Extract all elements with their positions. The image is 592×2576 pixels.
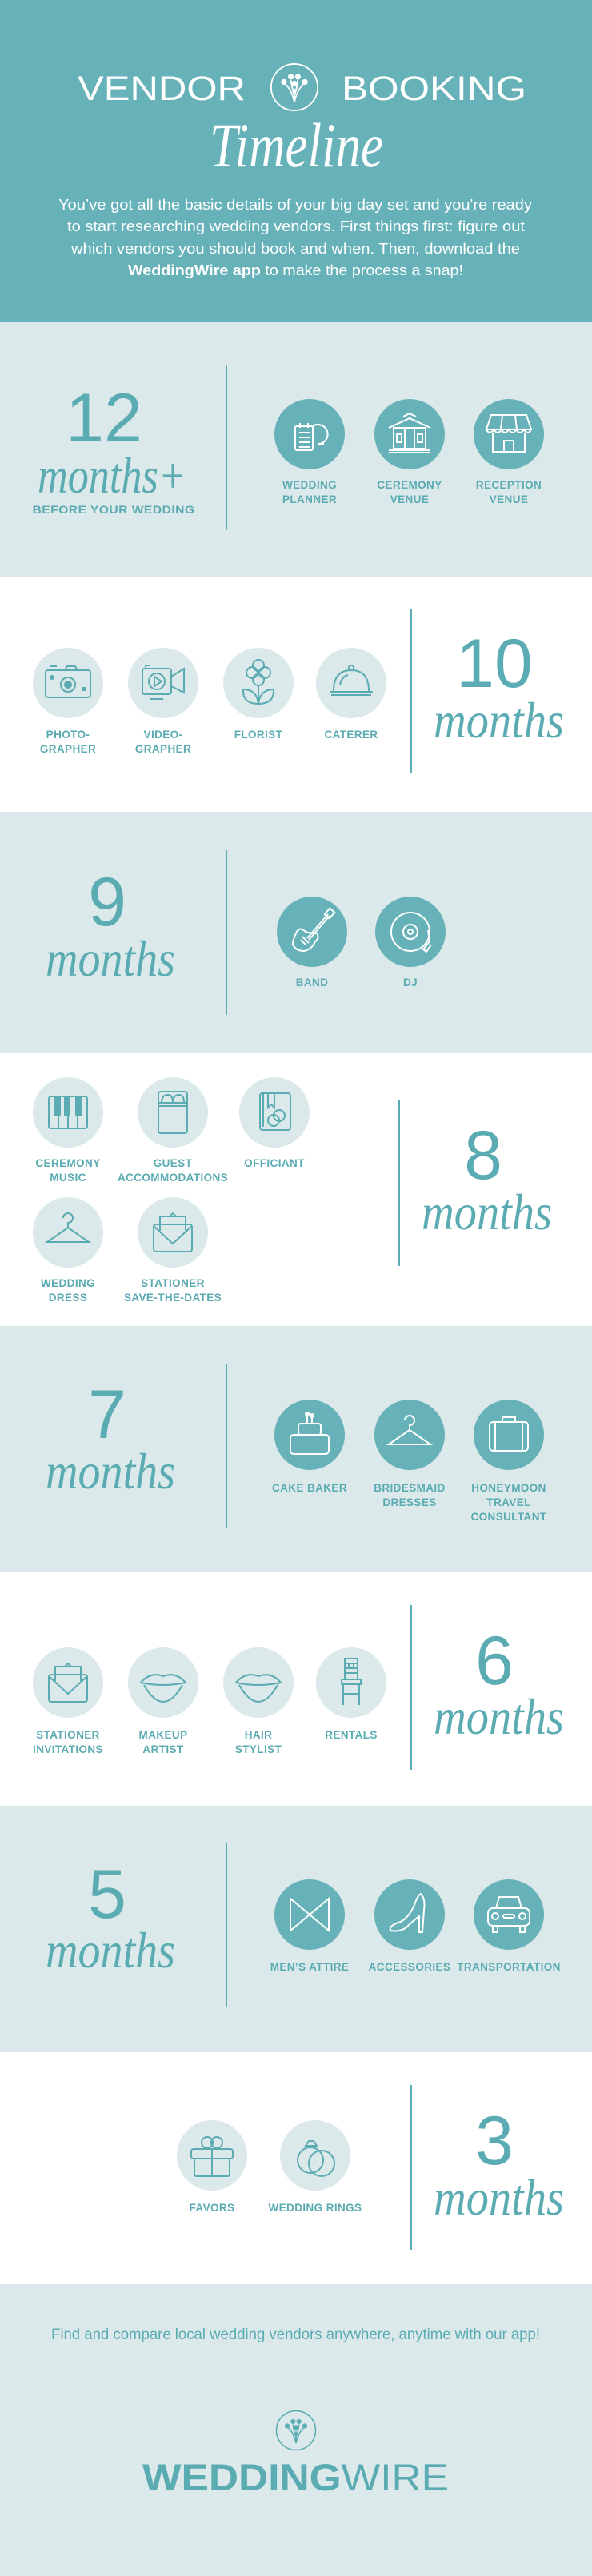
vendor: honeymoon travel consultant: TRAVEL: [486, 1496, 531, 1508]
vendor: ceremony venue: VENUE: [390, 493, 429, 505]
vendor: honeymoon travel consultant: CONSULTANT: [470, 1511, 547, 1523]
vendor: videographer: GRAPHER: [135, 743, 191, 755]
months: months: [46, 930, 175, 987]
vendor: stationer save-the-dates: [124, 1197, 222, 1304]
panel: 9 months: [0, 812, 592, 1053]
title: timeline script: Timeline: [210, 110, 383, 180]
vendor: makeup artist: ARTIST: [142, 1743, 184, 1755]
vendor: rentals: [316, 1647, 386, 1741]
vendor: wedding planner: WEDDING: [282, 479, 337, 491]
vendor: stationer invitations: [33, 1647, 103, 1755]
vendor: cake baker: [272, 1400, 347, 1494]
vendor: transportation: TRANSPORTATION: [457, 1961, 561, 1973]
vendor: stationer save-the-dates: STATIONER: [141, 1277, 205, 1289]
vendor: bridesmaid dresses: DRESSES: [382, 1496, 437, 1508]
vendor: caterer: CATERER: [324, 729, 378, 741]
vendor: accessories: [369, 1879, 450, 1973]
vendor: mens attire: MEN’S ATTIRE: [270, 1961, 349, 1973]
vendor: guest accommodations: ACCOMMODATIONS: [118, 1172, 228, 1184]
vendor: reception venue: VENUE: [490, 493, 528, 505]
vendor: photographer: GRAPHER: [40, 743, 96, 755]
vendor: hair stylist: HAIR: [245, 1729, 272, 1741]
number 8: 8: [464, 1117, 502, 1194]
vendor: bridesmaid dresses: BRIDESMAID: [374, 1482, 446, 1494]
number 5: 5: [88, 1856, 126, 1933]
vendor: hair stylist: [223, 1647, 294, 1755]
title: vendor booking: VENDOR: [78, 70, 246, 108]
number 12: 12: [66, 380, 142, 457]
vendor: favors: [177, 2120, 247, 2214]
vendor: guest accommodations: GUEST: [154, 1157, 193, 1169]
vendor: makeup artist: [128, 1647, 198, 1755]
vendor: florist: [223, 648, 294, 741]
vendor: dj: DJ: [403, 976, 418, 988]
vendor: hair stylist: STYLIST: [235, 1743, 282, 1755]
vendor: makeup artist: MAKEUP: [139, 1729, 187, 1741]
vendor: ceremony venue: CEREMONY: [377, 479, 442, 491]
vendor: cake baker: CAKE BAKER: [272, 1482, 347, 1494]
vendor: photographer: [33, 648, 103, 755]
panel: 12 months: [0, 322, 592, 577]
vendor: ceremony music: MUSIC: [50, 1172, 86, 1184]
vendor: mens attire: [270, 1879, 349, 1973]
months+: months+: [38, 447, 186, 504]
intro paragraph: to start researching wedding vendors. First things first: figure out: [67, 218, 525, 234]
vendor: transportation: [457, 1879, 561, 1973]
vendor: band: [277, 897, 347, 988]
months: months: [422, 1184, 552, 1240]
vendor: wedding dress: [33, 1197, 103, 1304]
vendor: band: BAND: [296, 976, 328, 988]
months: months: [434, 2169, 564, 2226]
vendor: ceremony music: CEREMONY: [35, 1157, 101, 1169]
vendor: wedding planner: PLANNER: [282, 493, 337, 505]
header: [0, 0, 592, 322]
vendor: stationer save-the-dates: SAVE-THE-DATES: [124, 1292, 222, 1304]
intro paragraph: WeddingWire app to make the process a snap!: [128, 262, 463, 278]
vendor: wedding dress: DRESS: [49, 1292, 87, 1304]
vendor: florist: FLORIST: [234, 729, 283, 741]
number 3: 3: [475, 2103, 514, 2179]
vendor: honeymoon travel consultant: [470, 1400, 547, 1523]
title: vendor booking: BOOKING: [342, 70, 526, 108]
vendor: videographer: VIDEO-: [144, 729, 182, 741]
vendor: rentals: RENTALS: [325, 1729, 378, 1741]
panel: 3 months: [0, 2052, 592, 2284]
before your wedding: BEFORE YOUR WEDDING: [32, 504, 195, 516]
vendor: favors: FAVORS: [190, 2202, 234, 2214]
vendor: wedding dress: WEDDING: [41, 1277, 95, 1289]
vendor: officiant: OFFICIANT: [244, 1157, 305, 1169]
title: vendor booking: [78, 70, 526, 108]
vendor: stationer invitations: STATIONER: [36, 1729, 100, 1741]
vendor: officiant: [239, 1077, 310, 1169]
number 6: 6: [475, 1623, 514, 1699]
vendor: videographer: [128, 648, 198, 755]
vendor: wedding planner: [274, 399, 345, 505]
vendor: honeymoon travel consultant: HONEYMOON: [471, 1482, 546, 1494]
number 7: 7: [88, 1376, 126, 1453]
months: months: [46, 1922, 175, 1979]
intro paragraph: You’ve got all the basic details of your big day set and you're ready: [58, 197, 532, 213]
vendor: ceremony venue: [374, 399, 445, 505]
vendor: wedding rings: WEDDING RINGS: [269, 2202, 362, 2214]
icon: logo: [271, 64, 318, 110]
vendor: reception venue: [474, 399, 544, 505]
brand wordmark: WEDDING WIRE: [142, 2456, 449, 2498]
number 9: 9: [88, 864, 126, 941]
footer text: Find and compare local wedding vendors anywhere, anytime with our app!: [51, 2326, 540, 2343]
panel: 7 months: [0, 1326, 592, 1572]
panel: 5 months: [0, 1806, 592, 2052]
vendor: stationer invitations: INVITATIONS: [33, 1743, 103, 1755]
vendor: bridesmaid dresses: [374, 1400, 446, 1508]
icon: footer logo: [276, 2410, 316, 2450]
vendor: reception venue: RECEPTION: [476, 479, 542, 491]
panel: 10 months: [0, 577, 592, 812]
number 10: 10: [456, 625, 533, 702]
footer: [0, 2284, 592, 2576]
vendor: caterer: [316, 648, 386, 741]
vendor: ceremony music: [33, 1077, 103, 1184]
vendor: dj: [375, 897, 446, 988]
panel: 8 months: [0, 1053, 592, 1326]
vendor: accessories: ACCESSORIES: [369, 1961, 450, 1973]
months: months: [434, 692, 564, 749]
months: months: [46, 1443, 175, 1500]
intro paragraph: [58, 197, 532, 278]
months: months: [434, 1688, 564, 1745]
vendor: wedding rings: [269, 2120, 362, 2214]
panel: 6 months: [0, 1572, 592, 1806]
intro paragraph: which vendors you should book and when. Then, download the: [70, 241, 520, 257]
vendor: photographer: PHOTO-: [46, 729, 90, 741]
vendor: guest accommodations: [118, 1077, 228, 1184]
